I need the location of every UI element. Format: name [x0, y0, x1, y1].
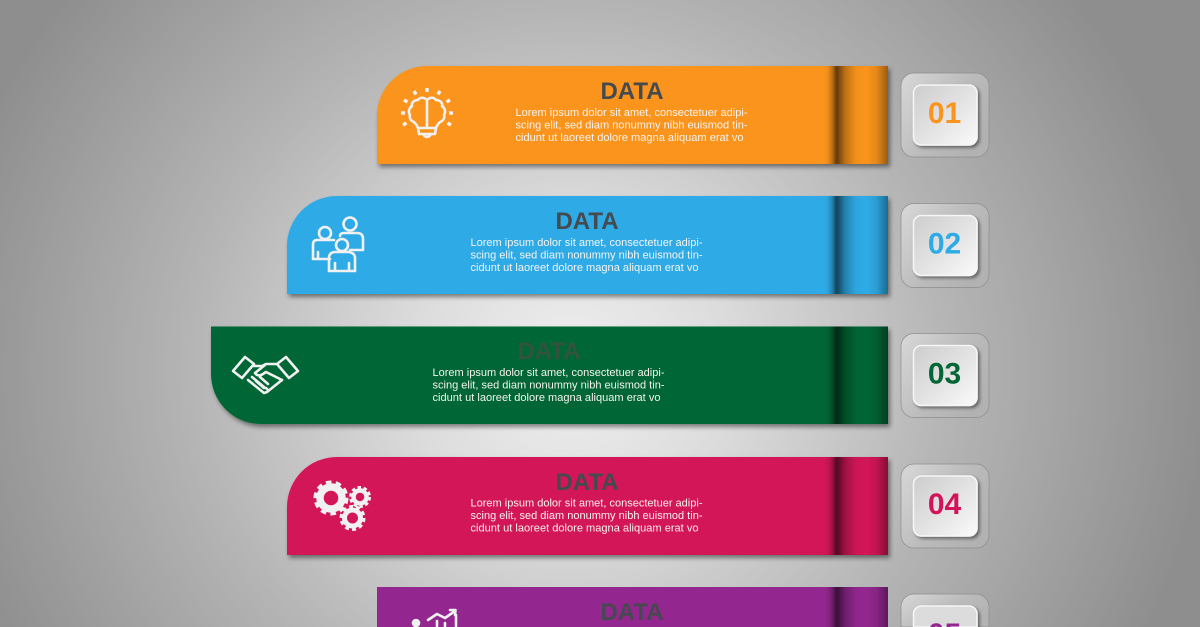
icon: gears — [316, 482, 370, 530]
number button 02: 02 — [928, 228, 961, 260]
icon: brain light bulb — [401, 88, 453, 137]
body text: Lorem ipsum dolor sit amet, consectetuer adipi- — [470, 498, 703, 510]
number button 03: 03 — [928, 358, 961, 390]
banner 01: orange — [377, 66, 888, 164]
heading: DATA — [517, 338, 581, 365]
heading: DATA — [600, 78, 664, 105]
body text: scing elit, sed diam nonummy nibh euismod tin- — [516, 120, 748, 132]
banner 05: purple — [377, 587, 888, 627]
number button 04: 04 — [928, 488, 961, 521]
body text: Lorem ipsum dolor sit amet, consectetuer adipi- — [470, 237, 703, 249]
body text: scing elit, sed diam nonummy nibh euismod tin- — [432, 380, 665, 392]
icon: growth chart — [413, 610, 456, 626]
body text — [516, 107, 748, 144]
number button 05 — [901, 594, 989, 627]
body text: cidunt ut laoreet dolore magna aliquam erat vo — [516, 132, 744, 144]
body text — [432, 367, 665, 404]
body text: Lorem ipsum dolor sit amet, consectetuer adipi- — [516, 107, 748, 119]
icon: handshake — [233, 357, 298, 393]
body text: scing elit, sed diam nonummy nibh euismod tin- — [470, 250, 703, 262]
number button 02 — [901, 204, 989, 288]
body text — [470, 237, 703, 274]
number button 01 — [901, 73, 989, 157]
banner 02: blue — [287, 196, 888, 294]
icon: group of people — [313, 218, 363, 271]
number button 01: 01 — [928, 97, 961, 130]
body text: cidunt ut laoreet dolore magna aliquam erat vo — [470, 522, 698, 534]
banner 04: crimson — [287, 457, 888, 555]
body text — [470, 498, 703, 534]
heading: DATA — [600, 599, 664, 626]
heading: DATA — [555, 208, 619, 235]
body text: Lorem ipsum dolor sit amet, consectetuer adipi- — [432, 367, 665, 379]
body text: cidunt ut laoreet dolore magna aliquam erat vo — [470, 262, 698, 274]
number button 04 — [901, 464, 989, 548]
heading: DATA — [555, 469, 619, 496]
body text: cidunt ut laoreet dolore magna aliquam erat vo — [432, 392, 660, 404]
number button 03 — [901, 334, 989, 418]
body text: scing elit, sed diam nonummy nibh euismod tin- — [470, 510, 703, 522]
banner 03: green — [211, 326, 888, 424]
